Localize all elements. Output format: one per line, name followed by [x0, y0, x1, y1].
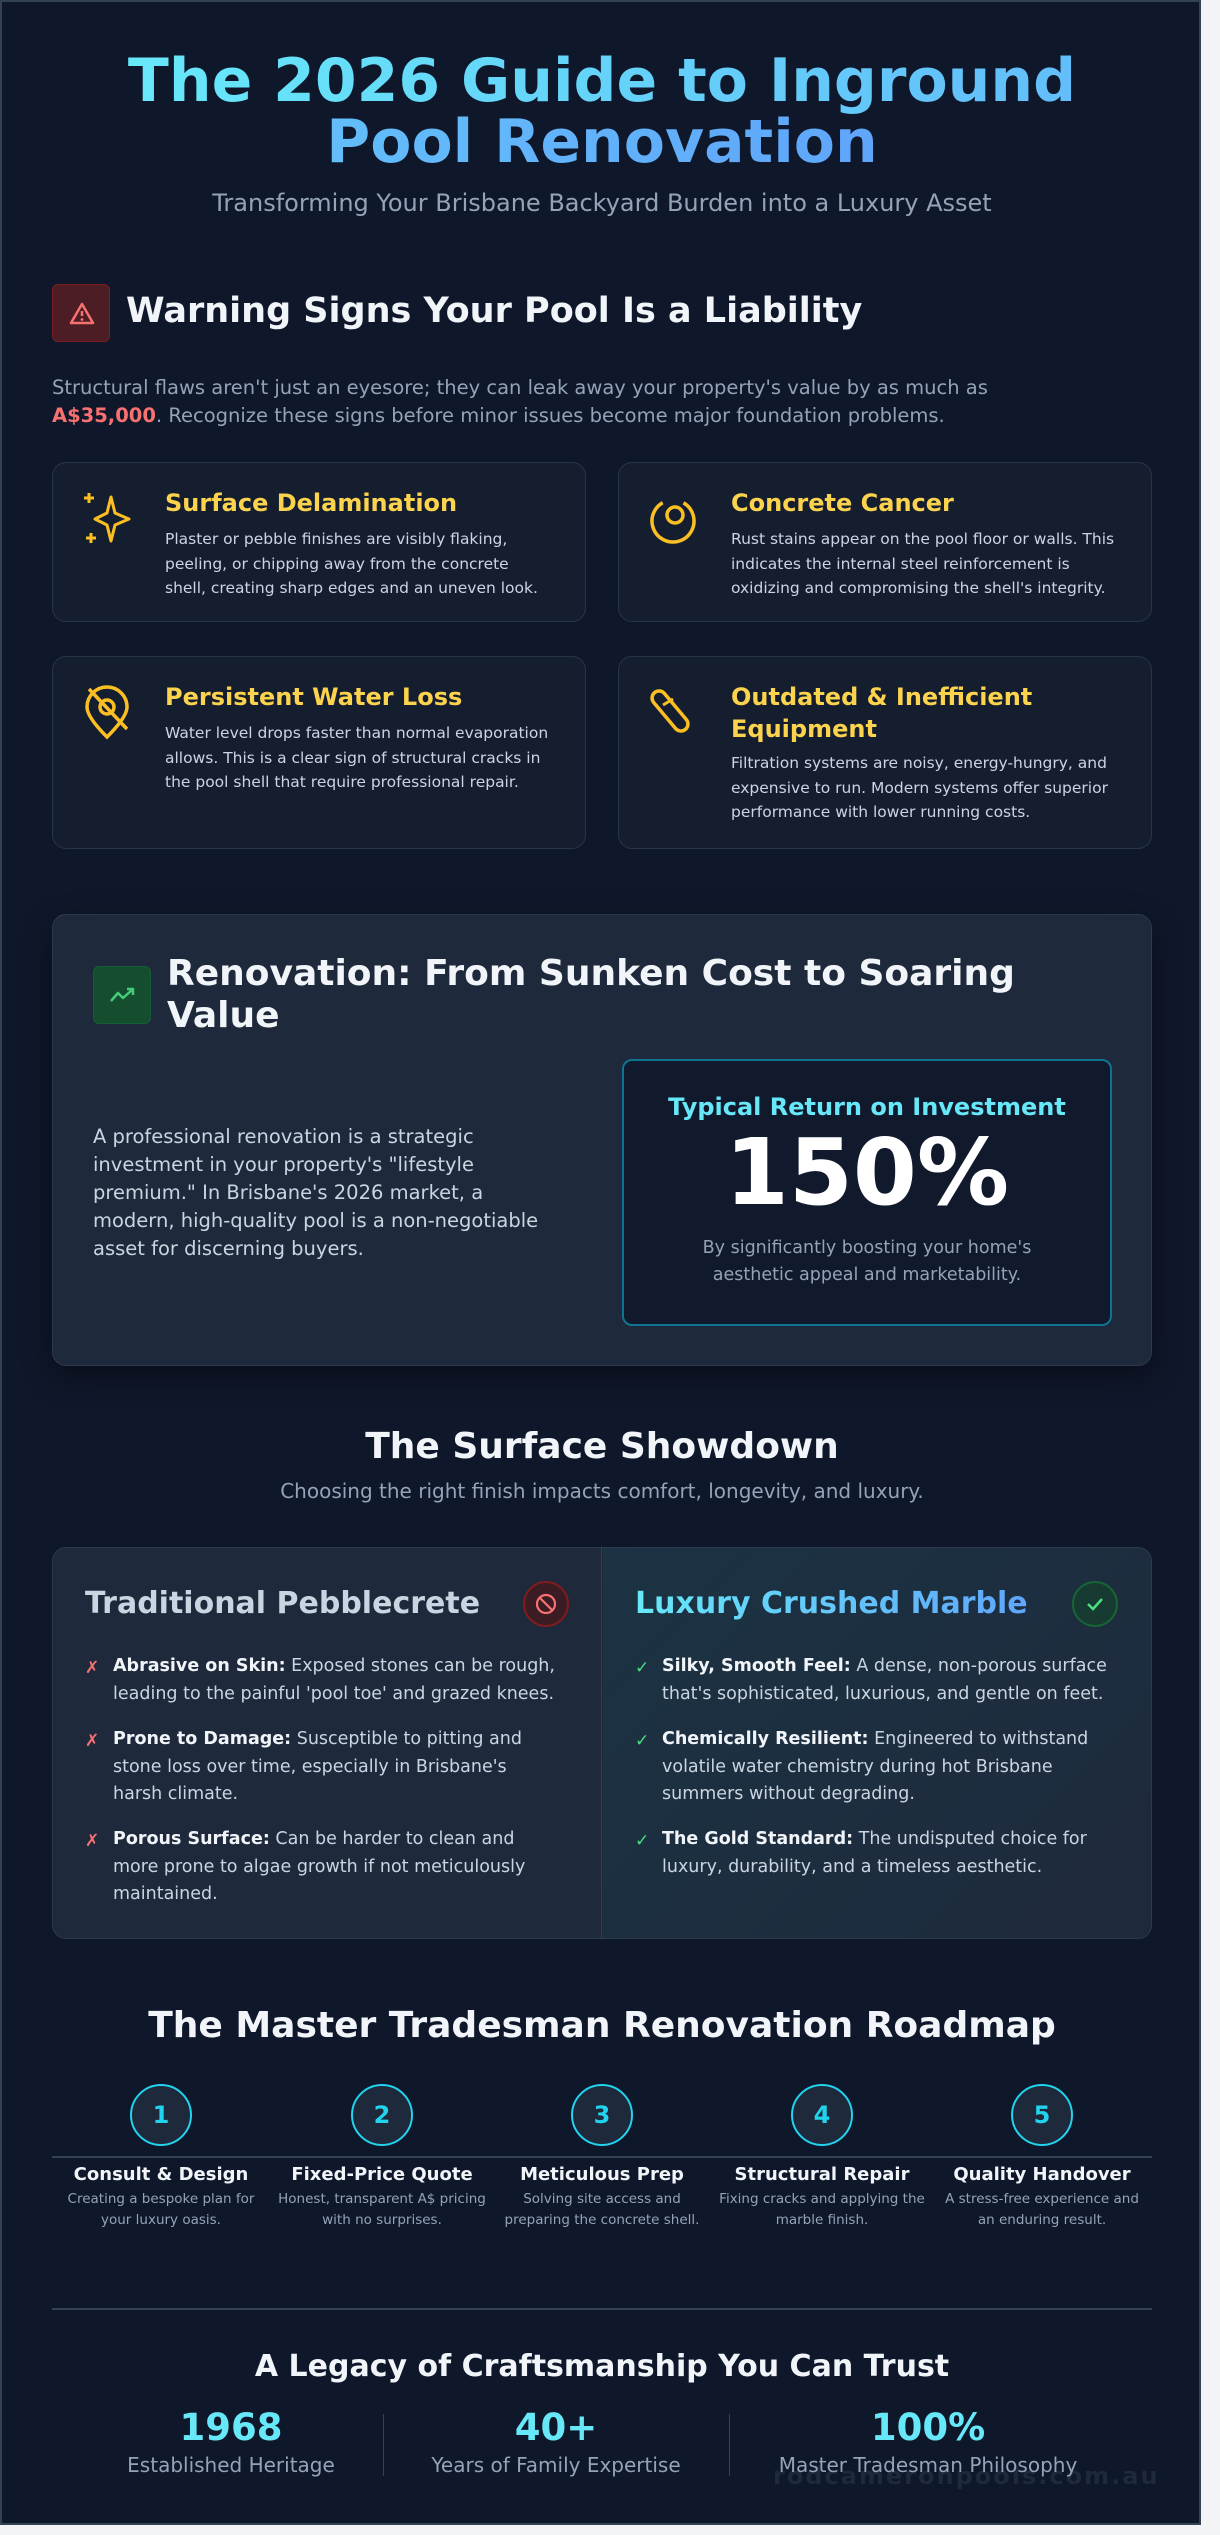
step 3: Meticulous Prep [520, 2164, 684, 2185]
card: surface delamination: Plaster or pebble finishes are visibly flaking, peeling, or chipping away from the concrete shell, creating sharp edges and an uneven look. [165, 530, 538, 597]
stat: 40+: Years of Family Expertise [431, 2453, 681, 2477]
title: Pool Renovation [326, 107, 878, 177]
callout: ROI: By significantly boosting your home's aesthetic appeal and marketability. [703, 1238, 1031, 1285]
column: pebblecrete [53, 1548, 602, 1940]
column: crushed marble: ✓ [635, 1658, 649, 1678]
column: crushed marble [603, 1548, 1153, 1940]
warning heading: Warning Signs Your Pool Is a Liability [126, 291, 862, 331]
card: water loss: Persistent Water Loss [165, 683, 462, 711]
callout: ROI [622, 1059, 1112, 1326]
panel: comparison [52, 1547, 1152, 1939]
stat: 1968: 1968 [180, 2406, 282, 2449]
stat: 100%: Master Tradesman Philosophy [779, 2453, 1077, 2477]
card: surface delamination [52, 462, 586, 622]
step 1 [68, 2084, 254, 2228]
title [128, 46, 1076, 177]
step 4: Structural Repair [735, 2164, 909, 2185]
column: pebblecrete: Abrasive on Skin: Exposed stones can be rough, leading to the painful 'pool toe' and grazed knees. [113, 1656, 555, 1704]
icon: wrench [650, 689, 690, 733]
stat: 40+ [431, 2406, 681, 2477]
step 5: Quality Handover [953, 2164, 1131, 2185]
step 1: Consult & Design [74, 2164, 248, 2185]
card: water loss [52, 656, 586, 849]
column: pebblecrete: Traditional Pebblecrete [85, 1586, 480, 1621]
column: crushed marble: The Gold Standard: The undisputed choice for luxury, durability, and a timeless aesthetic. [662, 1829, 1087, 1876]
card: equipment: Outdated & Inefficient Equipment [731, 683, 1032, 743]
step 2: Fixed-Price Quote [291, 2164, 473, 2185]
subtitle: Transforming Your Brisbane Backyard Burden into a Luxury Asset [212, 189, 992, 217]
step 5 [945, 2084, 1139, 2228]
icon: location off [85, 685, 129, 740]
card: concrete cancer: Rust stains appear on the pool floor or walls. This indicates the internal steel reinforcement is oxidizing and compromising the shell's integrity. [731, 530, 1114, 597]
step 3: Solving site access and preparing the concrete shell. [505, 2191, 699, 2228]
card: water loss: Water level drops faster than normal evaporation allows. This is a clear sign of structural cracks in the pool shell that require professional repair. [165, 724, 548, 791]
step 5: 5 [1034, 2101, 1050, 2129]
stat: 40+: 40+ [515, 2406, 597, 2449]
heading: legacy: A Legacy of Craftsmanship You Can Trust [255, 2349, 949, 2384]
icon: swirl [650, 501, 696, 544]
stat: 1968: Established Heritage [127, 2453, 335, 2477]
stat: 100% [779, 2406, 1077, 2477]
heading: roadmap: The Master Tradesman Renovation Roadmap [148, 2005, 1056, 2046]
heading: Renovation: From Sunken Cost to Soaring Value [167, 953, 1015, 1036]
heading: surface showdown: The Surface Showdown [365, 1426, 839, 1467]
step 1: 1 [153, 2101, 169, 2129]
column: pebblecrete: ✗ [85, 1658, 99, 1678]
panel: renovation value [52, 914, 1152, 1366]
step 1: Creating a bespoke plan for your luxury oasis. [68, 2191, 254, 2228]
text: investment: A professional renovation is a strategic investment in your property's "lifestyle premium." In Brisbane's 2026 market, a modern, high-quality pool is a non-negotiable asset for discerning buyers. [93, 1125, 538, 1260]
icon: ban [523, 1581, 569, 1627]
step 2 [278, 2084, 486, 2228]
column: pebblecrete: Porous Surface: Can be harder to clean and more prone to algae growth if not meticulously maintained. [113, 1829, 525, 1904]
roadmap timeline [52, 2156, 1152, 2158]
step 3 [505, 2084, 699, 2228]
card: concrete cancer: Concrete Cancer [731, 489, 954, 517]
step 5: A stress-free experience and an enduring result. [945, 2191, 1139, 2228]
stat: 100%: 100% [871, 2406, 985, 2449]
warning heading [52, 284, 862, 342]
column: pebblecrete: ✗ [85, 1731, 99, 1751]
icon: trending up [93, 966, 151, 1024]
card: equipment [618, 656, 1152, 849]
step 4 [719, 2084, 925, 2228]
step 2: 2 [374, 2101, 390, 2129]
step 4: 4 [814, 2101, 830, 2129]
card: surface delamination: Surface Delamination [165, 489, 457, 517]
icon: sparkle [84, 493, 130, 543]
icon: warning [52, 284, 110, 342]
column: crushed marble: Luxury Crushed Marble [635, 1586, 1028, 1621]
icon: check [1072, 1581, 1118, 1627]
callout: ROI: 150% [725, 1119, 1009, 1226]
column: crushed marble: Chemically Resilient: Engineered to withstand volatile water chemistry during hot Brisbane summers without degrading. [662, 1729, 1088, 1804]
watermark: rodcameronpools.com.au [773, 2462, 1160, 2490]
subheading: Choosing the right finish impacts comfort, longevity, and luxury. [280, 1479, 924, 1503]
card: concrete cancer [618, 462, 1152, 622]
step 4: Fixing cracks and applying the marble finish. [719, 2191, 925, 2228]
intro paragraph: Structural flaws aren't just an eyesore; they can leak away your property's value by as much as A$35,000. Recognize these signs before minor issues become major foundation problems. [52, 376, 988, 427]
callout: ROI: Typical Return on Investment [668, 1093, 1066, 1121]
step 2: Honest, transparent A$ pricing with no surprises. [278, 2191, 486, 2228]
stat: 1968 [127, 2406, 335, 2477]
card: equipment: Filtration systems are noisy, energy-hungry, and expensive to run. Modern systems offer superior performance with lower running costs. [731, 754, 1108, 821]
step 3: 3 [594, 2101, 610, 2129]
column: pebblecrete: ✗ [85, 1831, 99, 1851]
column: crushed marble: ✓ [635, 1731, 649, 1751]
title: The 2026 Guide to Inground [128, 46, 1076, 116]
column: pebblecrete: Prone to Damage: Susceptible to pitting and stone loss over time, especially in Brisbane's harsh climate. [113, 1729, 522, 1804]
column: crushed marble: Silky, Smooth Feel: A dense, non-porous surface that's sophisticated, luxurious, and gentle on feet. [662, 1656, 1107, 1704]
column: crushed marble: ✓ [635, 1831, 649, 1851]
